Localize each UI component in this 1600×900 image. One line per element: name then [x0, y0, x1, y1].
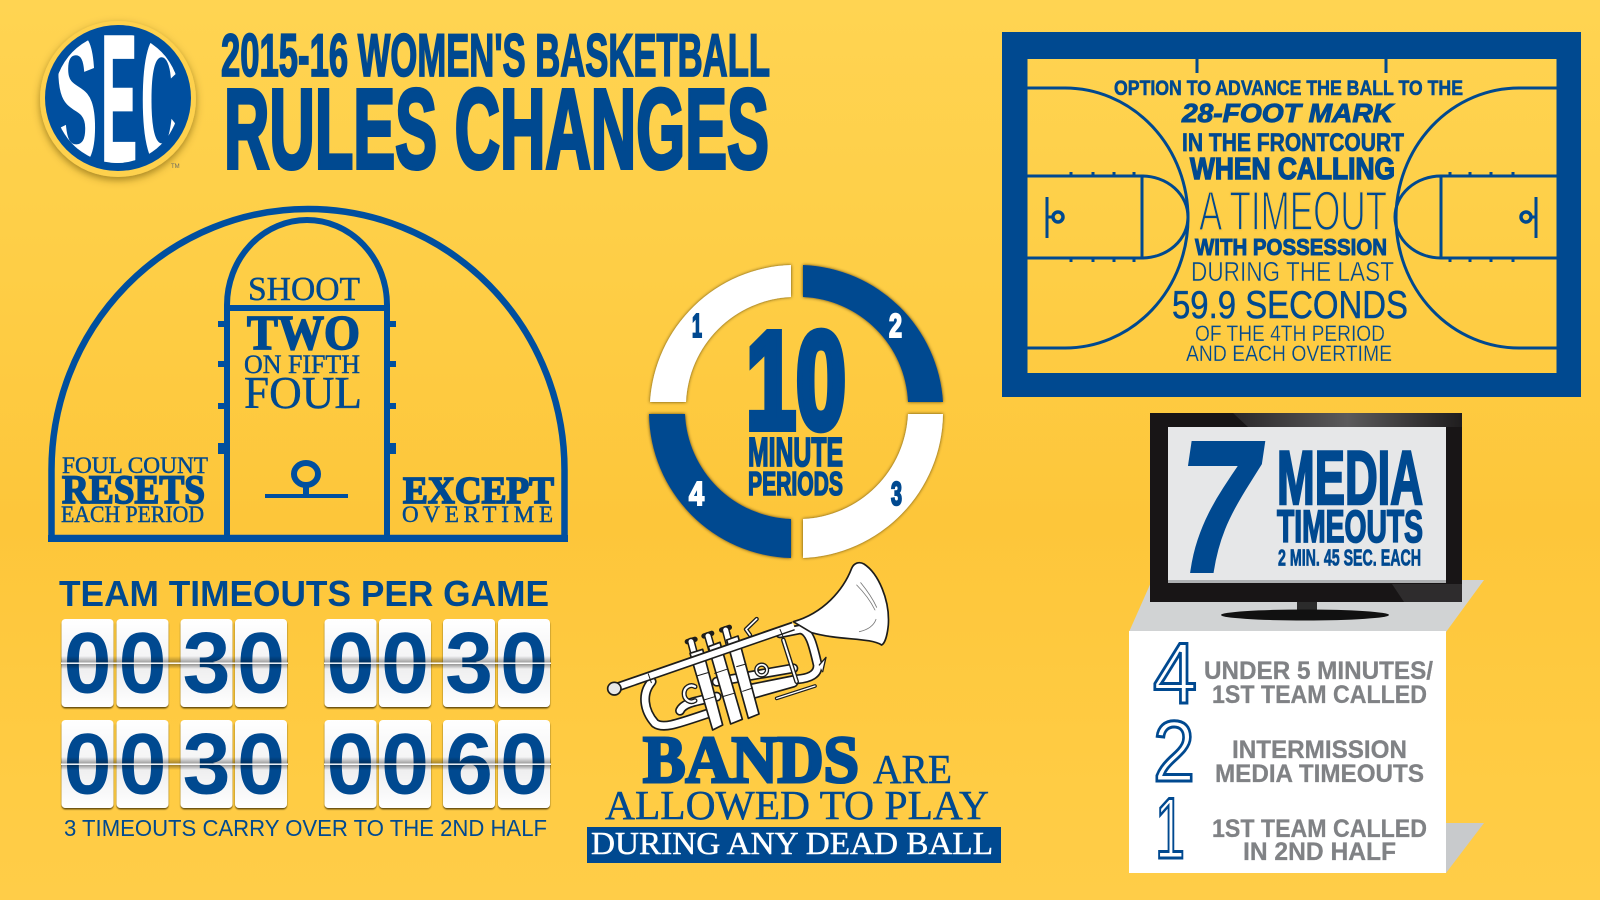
- media breakdown: one: IN 2ND HALF: [1243, 838, 1396, 866]
- media breakdown: one: 1ST TEAM CALLED: [1212, 815, 1427, 843]
- shoot two on fifth foul text: FOUL: [244, 367, 362, 418]
- shoot two on fifth foul text: ON FIFTH: [244, 350, 360, 379]
- period numbers: 2: [889, 307, 902, 344]
- foul count resets text: FOUL COUNT: [62, 453, 208, 478]
- period numbers: [689, 307, 902, 512]
- media breakdown: four: [1153, 626, 1433, 722]
- foul count resets text: [61, 453, 208, 527]
- heading: TEAM TIMEOUTS PER GAME: [59, 573, 549, 614]
- seven media timeouts text: 2 MIN. 45 SEC. EACH: [1278, 544, 1421, 570]
- media breakdown: two: 2: [1153, 704, 1195, 800]
- dead ball banner: DURING ANY DEAD BALL: [591, 825, 993, 861]
- panel: ten minute periods ring: [649, 265, 943, 558]
- media breakdown: two: MEDIA TIMEOUTS: [1215, 760, 1424, 788]
- ten minute periods text: [746, 304, 846, 502]
- timeout rule text: 59.9 SECONDS: [1172, 284, 1408, 327]
- period numbers: 4: [689, 475, 705, 512]
- seven media timeouts text: MEDIA: [1277, 436, 1423, 521]
- flip clock row 1: 0: [381, 616, 429, 712]
- panel: team timeouts per game: [59, 573, 551, 841]
- media breakdown: four: 1ST TEAM CALLED: [1212, 681, 1427, 709]
- flip clock row 1: 0: [237, 616, 285, 712]
- flip clock row 1: 0: [327, 616, 374, 712]
- icon: trumpet: [608, 563, 888, 730]
- flip clock row 1: 0: [119, 616, 166, 712]
- foul count resets text: EACH PERIOD: [61, 502, 204, 527]
- panel: media timeouts tv and stand: [1129, 404, 1484, 877]
- flip clock row 2: 0: [381, 716, 429, 812]
- timeout rule text: A TIMEOUT: [1199, 179, 1387, 242]
- timeout rule text: [1114, 77, 1463, 366]
- flip clock row 1: [61, 616, 551, 712]
- stand front: [1129, 631, 1446, 873]
- panel: bands text: ALLOWED TO PLAY: [605, 782, 989, 828]
- title: 2015-16 WOMEN'S BASKETBALL: [221, 22, 770, 89]
- flip clock row 1: 3: [183, 616, 230, 712]
- flip clock row 2: [61, 716, 551, 812]
- title: RULES CHANGES: [224, 66, 769, 192]
- media breakdown: two: [1153, 704, 1424, 800]
- except overtime text: EXCEPT: [403, 470, 554, 512]
- ten minute periods text: PERIODS: [748, 465, 843, 502]
- SEC logo: S: [55, 0, 97, 204]
- court lines: [1027, 59, 1557, 348]
- timeout rule text: OF THE 4TH PERIOD: [1195, 321, 1385, 346]
- ten minute periods text: MINUTE: [748, 429, 843, 475]
- period numbers: 3: [891, 475, 902, 512]
- flip clock row 2: 0: [500, 716, 548, 812]
- shoot two on fifth foul text: [244, 271, 362, 418]
- flip clock row 2: 0: [64, 716, 111, 812]
- flip clock row 1: 0: [64, 616, 111, 712]
- panel: half-court fifth foul diagram: [48, 209, 568, 542]
- panel: bands text: BANDS: [643, 723, 859, 797]
- stand side flap: [1446, 823, 1484, 873]
- panel: full court timeout rule: [1002, 32, 1581, 397]
- panel: bands text: ARE: [873, 746, 952, 792]
- timeout rule text: DURING THE LAST: [1191, 256, 1394, 287]
- panel: bands text: [587, 723, 1001, 863]
- stand top: [1129, 580, 1484, 632]
- media breakdown: four: UNDER 5 MINUTES/: [1204, 657, 1433, 685]
- SEC logo: E: [101, 0, 137, 204]
- seven media timeouts text: [1180, 404, 1423, 611]
- flip clock row 2: 6: [445, 716, 493, 812]
- shoot two on fifth foul text: SHOOT: [248, 271, 360, 308]
- timeout rule text: OPTION TO ADVANCE THE BALL TO THE: [1114, 77, 1463, 100]
- title: [221, 22, 770, 192]
- flip clock row 2: 0: [119, 716, 166, 812]
- timeout rule text: AND EACH OVERTIME: [1186, 341, 1392, 366]
- seven media timeouts text: 7: [1180, 404, 1264, 611]
- icon: television: [1150, 404, 1462, 620]
- timeout rule text: WHEN CALLING: [1190, 151, 1395, 186]
- foul count resets text: RESETS: [62, 467, 205, 512]
- SEC logo: TM: [171, 164, 180, 170]
- flip clock row 1: 0: [500, 616, 548, 712]
- period numbers: 1: [692, 307, 702, 344]
- media breakdown: four: 4: [1153, 626, 1197, 722]
- SEC logo: [35, 19, 201, 185]
- timeout rule text: 28-FOOT MARK: [1181, 98, 1395, 128]
- infographic canvas: C: [141, 0, 180, 204]
- icon: hoop: [265, 463, 348, 498]
- media breakdown: one: 1: [1155, 781, 1185, 877]
- except overtime text: OVERTIME: [402, 502, 553, 527]
- flip clock row 1: 3: [445, 616, 493, 712]
- seven media timeouts text: TIMEOUTS: [1277, 501, 1423, 552]
- shoot two on fifth foul text: TWO: [247, 305, 360, 360]
- ten minute periods text: 10: [746, 304, 846, 458]
- timeout rule text: IN THE FRONTCOURT: [1182, 129, 1404, 157]
- flip clock row 2: 0: [327, 716, 374, 812]
- flip clock row 2: 0: [237, 716, 285, 812]
- timeout rule text: WITH POSSESSION: [1195, 234, 1387, 260]
- carry over note: 3 TIMEOUTS CARRY OVER TO THE 2ND HALF: [64, 815, 547, 841]
- flip clock row 2: 3: [183, 716, 230, 812]
- media breakdown: two: INTERMISSION: [1232, 736, 1407, 764]
- ring segments: [649, 265, 943, 558]
- media breakdown: one: [1155, 781, 1427, 877]
